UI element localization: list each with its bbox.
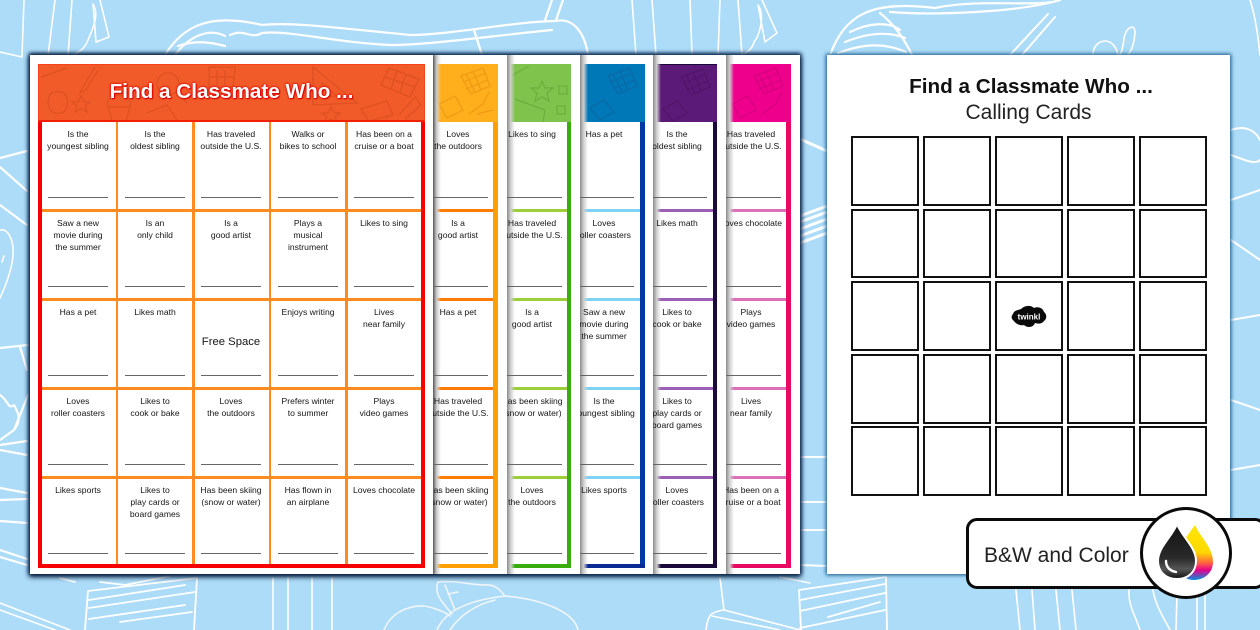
icon: twinkl logo: twinkl: [1018, 312, 1040, 322]
row 5: Likes sports: [55, 485, 101, 495]
row 1: bikes to school: [280, 141, 336, 151]
row 3: Has a pet: [60, 307, 96, 317]
worksheet strip: green: Loves: [521, 485, 543, 495]
icon: ink drops in circle: [1140, 507, 1232, 599]
row 4: Likes to: [140, 396, 170, 406]
worksheet strip: blue: Likes sports: [581, 485, 627, 495]
blue border: [640, 122, 645, 568]
worksheet strip: pink: Has traveled: [727, 129, 775, 139]
row 1: [47, 129, 414, 198]
row 1: cruise or a boat: [354, 141, 414, 151]
worksheet strip: pink: near family: [730, 408, 772, 418]
row 5: (snow or water): [201, 497, 261, 507]
row 1: outside the U.S.: [200, 141, 262, 151]
worksheet strip: blue: the summer: [581, 331, 627, 341]
row 2: movie during: [53, 230, 103, 240]
worksheet strip: blue: movie during: [580, 319, 629, 329]
row 2: Is a: [224, 218, 238, 228]
row 2: Saw a new: [57, 218, 99, 228]
worksheet strip: green: good artist: [512, 319, 552, 329]
row 2: musical: [293, 230, 323, 240]
icon: twinkl logo: [1012, 306, 1046, 327]
row 2: only child: [137, 230, 173, 240]
row 5: Has been skiing: [200, 485, 262, 495]
calling card grid: [851, 136, 1207, 496]
worksheet strip: orange: [433, 55, 507, 574]
worksheet strip: orange: good artist: [438, 230, 478, 240]
row 4: video games: [360, 408, 408, 418]
row 2: Is an: [146, 218, 164, 228]
worksheet strip: purple: Likes math: [656, 218, 698, 228]
worksheet strip: orange: Is a: [451, 218, 465, 228]
worksheet strip: pink: Plays: [740, 307, 762, 317]
row 3: Likes math: [134, 307, 176, 317]
worksheet strip: purple: Is the: [666, 129, 688, 139]
worksheet title: Find a Classmate Who ...: [110, 80, 353, 103]
worksheet strip: green: [507, 55, 580, 574]
worksheet header band: [38, 64, 425, 122]
row 5: board games: [130, 509, 180, 519]
worksheet strip: purple: Likes to: [662, 307, 692, 317]
row 1: oldest sibling: [130, 141, 180, 151]
row 5: Likes to: [140, 485, 170, 495]
worksheet strip: orange: the outdoors: [434, 141, 482, 151]
badge label: B&W and Color: [984, 544, 1129, 567]
worksheet strip: pink: video games: [727, 319, 775, 329]
row 4: cook or bake: [130, 408, 180, 418]
purple border: [713, 122, 717, 568]
row 4: the outdoors: [207, 408, 255, 418]
worksheet strip: green: Is a: [525, 307, 539, 317]
worksheet strip: green: the outdoors: [508, 497, 556, 507]
worksheet strip: purple: oldest sibling: [653, 141, 702, 151]
row 1: Walks or: [291, 129, 325, 139]
row 1: Has traveled: [207, 129, 255, 139]
panel: main red worksheet: [30, 55, 433, 574]
row 3: [48, 307, 414, 376]
row 4: to summer: [288, 408, 328, 418]
row 4: Loves: [220, 396, 242, 406]
worksheet strip: purple: Loves: [666, 485, 688, 495]
row 1: Is the: [67, 129, 89, 139]
row 2: [48, 218, 414, 287]
row 1: Is the: [144, 129, 166, 139]
row 4: [48, 396, 414, 465]
row 1: Has been on a: [356, 129, 412, 139]
worksheet strip: green: Likes to sing: [508, 129, 556, 139]
worksheet strip: blue: Loves: [593, 218, 615, 228]
green header: [507, 64, 571, 122]
worksheet strip: green: Has traveled: [508, 218, 556, 228]
row 3: Lives: [374, 307, 394, 317]
worksheet strip: purple: board games: [653, 420, 702, 430]
orange border: [493, 122, 498, 568]
worksheet strip: blue: Saw a new: [583, 307, 625, 317]
worksheet strip: blue: [580, 55, 653, 574]
row 1: youngest sibling: [47, 141, 109, 151]
panel: calling cards sheet: [827, 55, 1230, 574]
row 5: an airplane: [287, 497, 329, 507]
row 2: instrument: [288, 242, 328, 252]
worksheet strip: pink: Lives: [741, 396, 761, 406]
row 4: Loves: [67, 396, 89, 406]
green border: [567, 122, 571, 568]
orange header: [433, 64, 498, 122]
worksheet strip: purple: play cards or: [653, 408, 702, 418]
row 4: Prefers winter: [281, 396, 334, 406]
row 3: Enjoys writing: [281, 307, 334, 317]
calling cards subheading: Calling Cards: [965, 101, 1092, 124]
row 5: [48, 485, 415, 554]
row 4: Plays: [373, 396, 394, 406]
worksheet strip: orange: Has a pet: [440, 307, 476, 317]
row 5: Has flown in: [285, 485, 331, 495]
worksheet strip: orange: Has traveled: [434, 396, 482, 406]
row 2: the summer: [55, 242, 101, 252]
pink header: [726, 64, 791, 122]
back of stacked worksheets: [30, 55, 800, 574]
worksheet strip: purple: Likes to: [662, 396, 692, 406]
worksheet strip: purple: [653, 55, 726, 574]
row 5: Loves chocolate: [353, 485, 415, 495]
purple header: [653, 64, 717, 122]
row 5: play cards or: [130, 497, 180, 507]
calling cards heading: Find a Classmate Who ...: [909, 75, 1153, 98]
worksheet strip: blue: Is the: [593, 396, 615, 406]
worksheet strip: pink: [726, 55, 799, 574]
grid dividers: [116, 122, 118, 564]
callout: B&W and Color badge: [966, 518, 1260, 589]
row 4: roller coasters: [51, 408, 105, 418]
row 2: Likes to sing: [360, 218, 408, 228]
worksheet strip: purple: cook or bake: [653, 319, 702, 329]
row 3: Free Space: [202, 336, 260, 348]
worksheet strip: blue: Has a pet: [586, 129, 622, 139]
worksheet strip: orange: Loves: [447, 129, 469, 139]
blue header: [580, 64, 645, 122]
row 2: Plays a: [294, 218, 322, 228]
row 2: good artist: [211, 230, 251, 240]
row 3: near family: [363, 319, 405, 329]
pink border: [786, 122, 791, 568]
